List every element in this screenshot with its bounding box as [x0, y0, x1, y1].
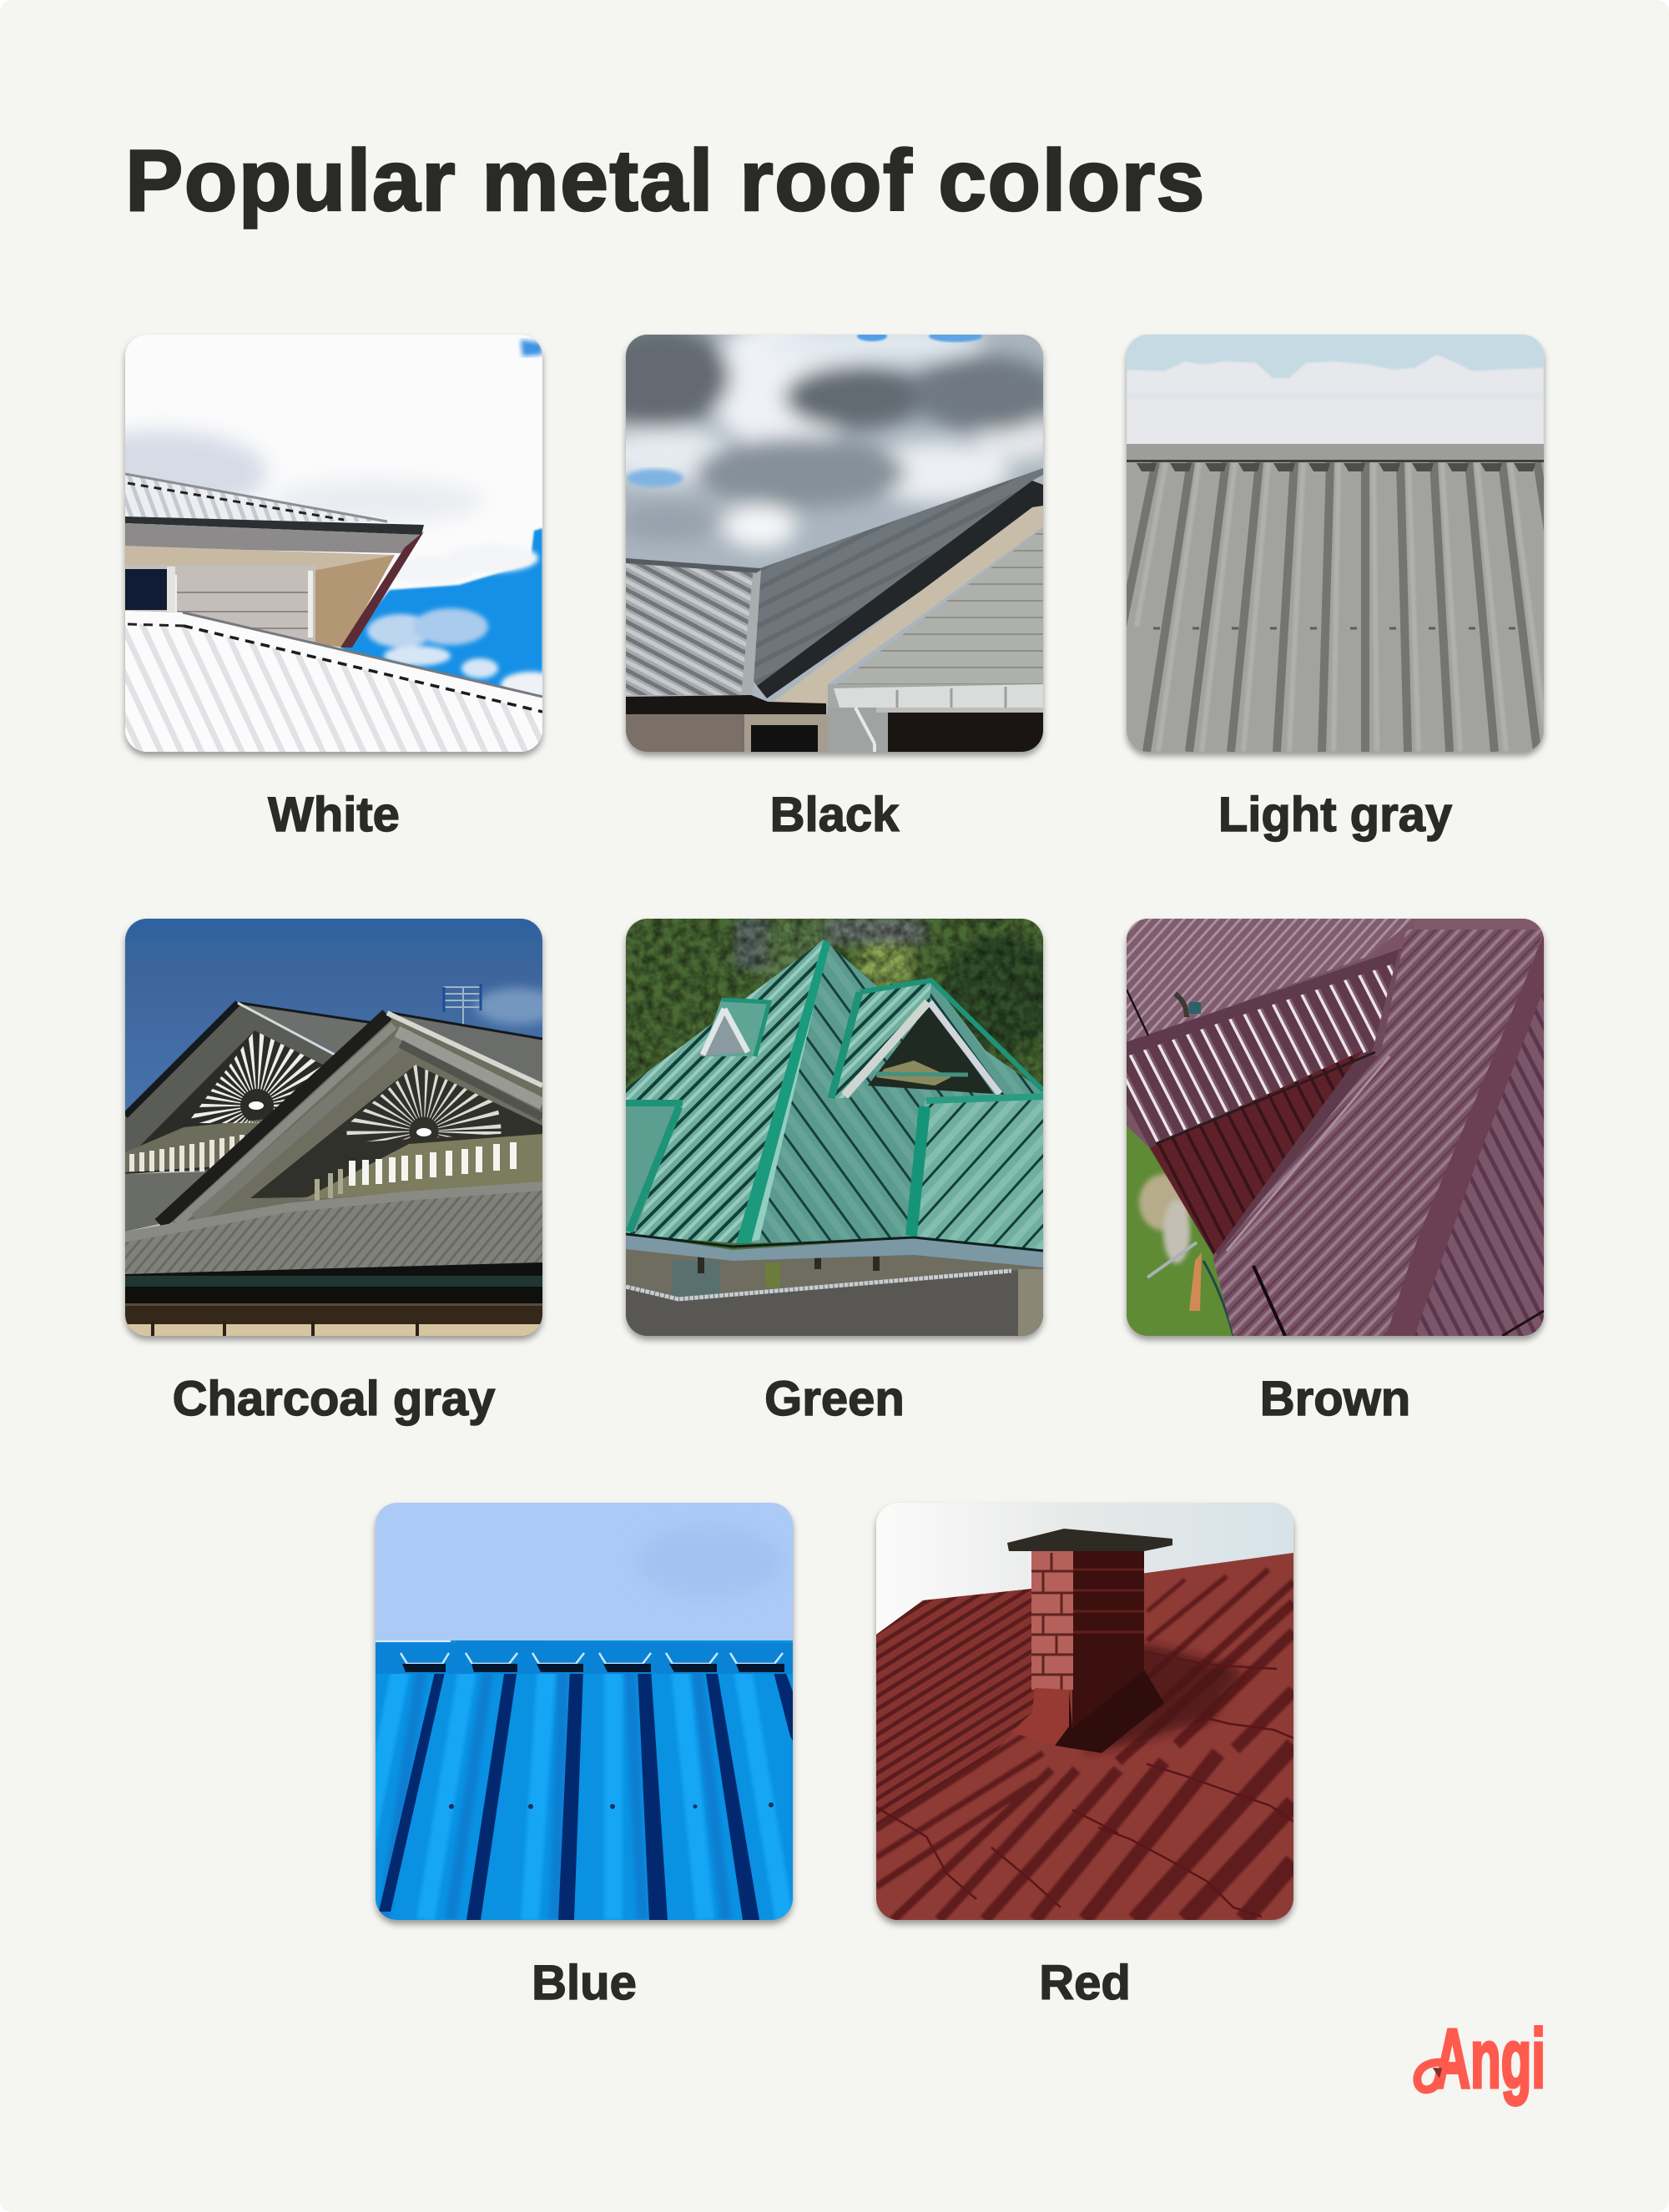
main hip ridge: [736, 940, 830, 1243]
ridge cap: [1127, 444, 1544, 471]
top roof plane: [1127, 919, 1414, 1044]
upper roof: [125, 474, 387, 522]
label: Brown: Brown: [1260, 1372, 1410, 1426]
main right face: [1213, 930, 1544, 1336]
panel: white roof: [121, 335, 547, 842]
label: Light gray: Light gray: [1218, 788, 1452, 842]
rear roof planes: [240, 1003, 542, 1086]
screws: [449, 1802, 774, 1809]
roof panel: [1122, 461, 1561, 752]
label: Blue: Blue: [532, 1956, 637, 2010]
right roof face: [911, 1096, 1043, 1250]
panel: charcoal gray roof: [121, 919, 547, 1427]
panel: green roof: [622, 919, 1047, 1426]
black fascia: [757, 481, 1043, 698]
chimney flashing: [1011, 1688, 1069, 1746]
roof surface: [876, 1553, 1293, 1920]
panel: red roof: [872, 1503, 1298, 2010]
logo fold: [1433, 2068, 1442, 2078]
panel: brown roof: [1122, 919, 1548, 1426]
gable wall: [774, 506, 1043, 706]
vent on roof: [1127, 990, 1201, 1035]
gutter: [626, 695, 826, 714]
photo: brown roof: [1127, 919, 1544, 1336]
label: Green: Green: [764, 1372, 905, 1426]
silver roof plane: [626, 558, 761, 695]
label: Black: Black: [770, 788, 899, 842]
logo: Angi: [1413, 2013, 1545, 2107]
gutter and fascia: [125, 1262, 542, 1336]
triangular panel: [1127, 951, 1404, 1257]
fascia: [626, 1234, 1043, 1267]
roof right upper: [843, 979, 1043, 1119]
dark roof plane: [751, 468, 1043, 686]
label: Charcoal gray: Charcoal gray: [173, 1372, 495, 1426]
main roof: [125, 1182, 542, 1275]
title: Popular metal roof colors: [125, 133, 1206, 229]
ground and vegetation: [1127, 1126, 1233, 1336]
photo: charcoal gray roof: [125, 919, 542, 1336]
photo: white roof: [125, 335, 542, 752]
left dormer: [697, 998, 769, 1056]
photo: black roof: [626, 335, 1043, 752]
logo loop: [1417, 2063, 1445, 2089]
antenna: [444, 984, 481, 1027]
roof centre face: [736, 940, 918, 1243]
panel: blue roof: [371, 1503, 797, 2010]
left lower roof: [125, 1172, 213, 1232]
pergola: [834, 684, 1043, 708]
ridge cap: [376, 1640, 793, 1674]
wall and window: [125, 565, 315, 642]
tree texture: [626, 919, 1043, 1127]
screws: [1153, 627, 1515, 629]
photo: blue roof: [376, 1503, 793, 1920]
right gable: [159, 1013, 542, 1224]
chimney cap: [1007, 1529, 1172, 1551]
panel: light gray roof: [1122, 335, 1548, 843]
chimney brick side: [1031, 1551, 1073, 1690]
right ridge: [1386, 935, 1544, 1336]
roof left face: [626, 940, 824, 1243]
far right face: [1414, 990, 1544, 1336]
photo: light gray roof: [1127, 335, 1544, 752]
left gable: [125, 1003, 338, 1174]
left small face: [626, 1102, 683, 1232]
photo: green roof: [626, 919, 1043, 1336]
photo: red roof: [876, 1503, 1293, 1920]
panel: black roof: [622, 335, 1047, 842]
tile courses: [876, 1652, 1293, 1917]
chimney dark side: [1072, 1549, 1144, 1728]
label: Red: Red: [1039, 1956, 1131, 2010]
roof panel: [350, 1640, 797, 1920]
eave and soffit: [125, 516, 424, 647]
vent slots: [352, 1142, 513, 1186]
lower roof: [125, 611, 542, 752]
label: White: White: [268, 788, 400, 842]
lower wall and windows: [626, 708, 1043, 752]
chimney shadow: [1085, 1645, 1243, 1753]
wall below: [626, 1249, 1043, 1336]
right dormer: [829, 979, 1043, 1098]
logo wordmark: Angi: [1435, 2013, 1545, 2105]
